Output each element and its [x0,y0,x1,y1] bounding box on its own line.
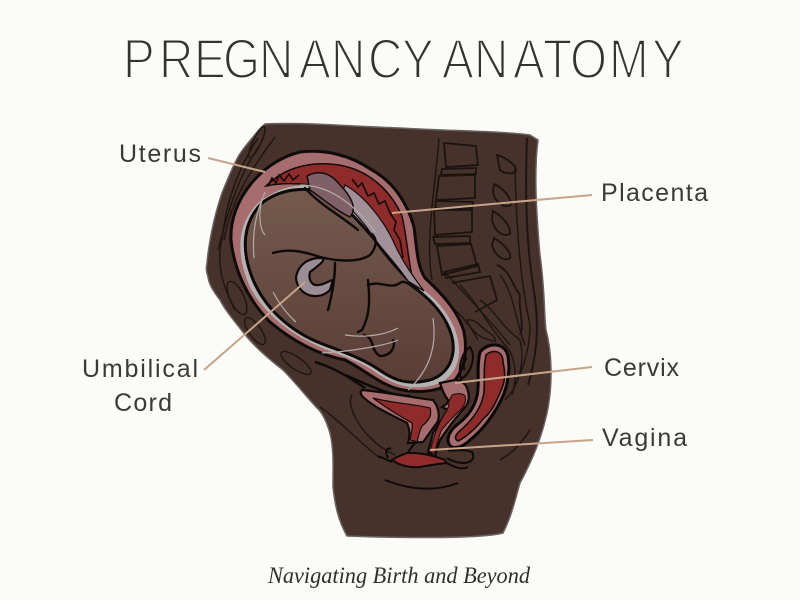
label: placenta: Placenta [601,179,708,207]
bladder [361,390,439,443]
amniotic membrane [240,185,459,387]
vulva folds [378,443,473,468]
footer signature: Navigating Birth and Beyond [267,563,530,588]
membrane over fetus shoulder [340,185,424,291]
label: vagina: Vagina [602,424,687,452]
label: uterus: Uterus [119,140,201,168]
leader line: placenta [392,195,592,213]
rectum [448,345,509,447]
placenta [266,164,412,276]
umbilical cord loop [296,258,333,296]
spine vertebrae [433,143,522,335]
leader line: vagina [430,440,593,450]
fetal limb outlines [273,188,422,356]
abdominal wall lines [218,125,537,489]
title: PREGNANCY ANATOMY [123,28,684,91]
uterus wall [231,151,466,391]
leader line: uterus [208,158,265,172]
cervix and vaginal canal [428,380,469,457]
label: umbilical cord: Cord [114,389,172,417]
fetus [245,189,453,382]
leader line: cervix [455,367,592,383]
label: umbilical cord [82,355,198,417]
placenta villi edge [268,174,403,258]
amniotic highlights [253,185,434,390]
lower uterine dark band [315,362,410,396]
leader line: umbilical cord [204,282,305,370]
body silhouette [206,123,551,538]
vulva [392,453,446,467]
label: cervix: Cervix [604,354,680,382]
label: umbilical cord: Umbilical [82,355,198,383]
anatomy illustration [206,123,551,538]
purple limb [307,173,353,217]
anus loop [460,347,473,379]
